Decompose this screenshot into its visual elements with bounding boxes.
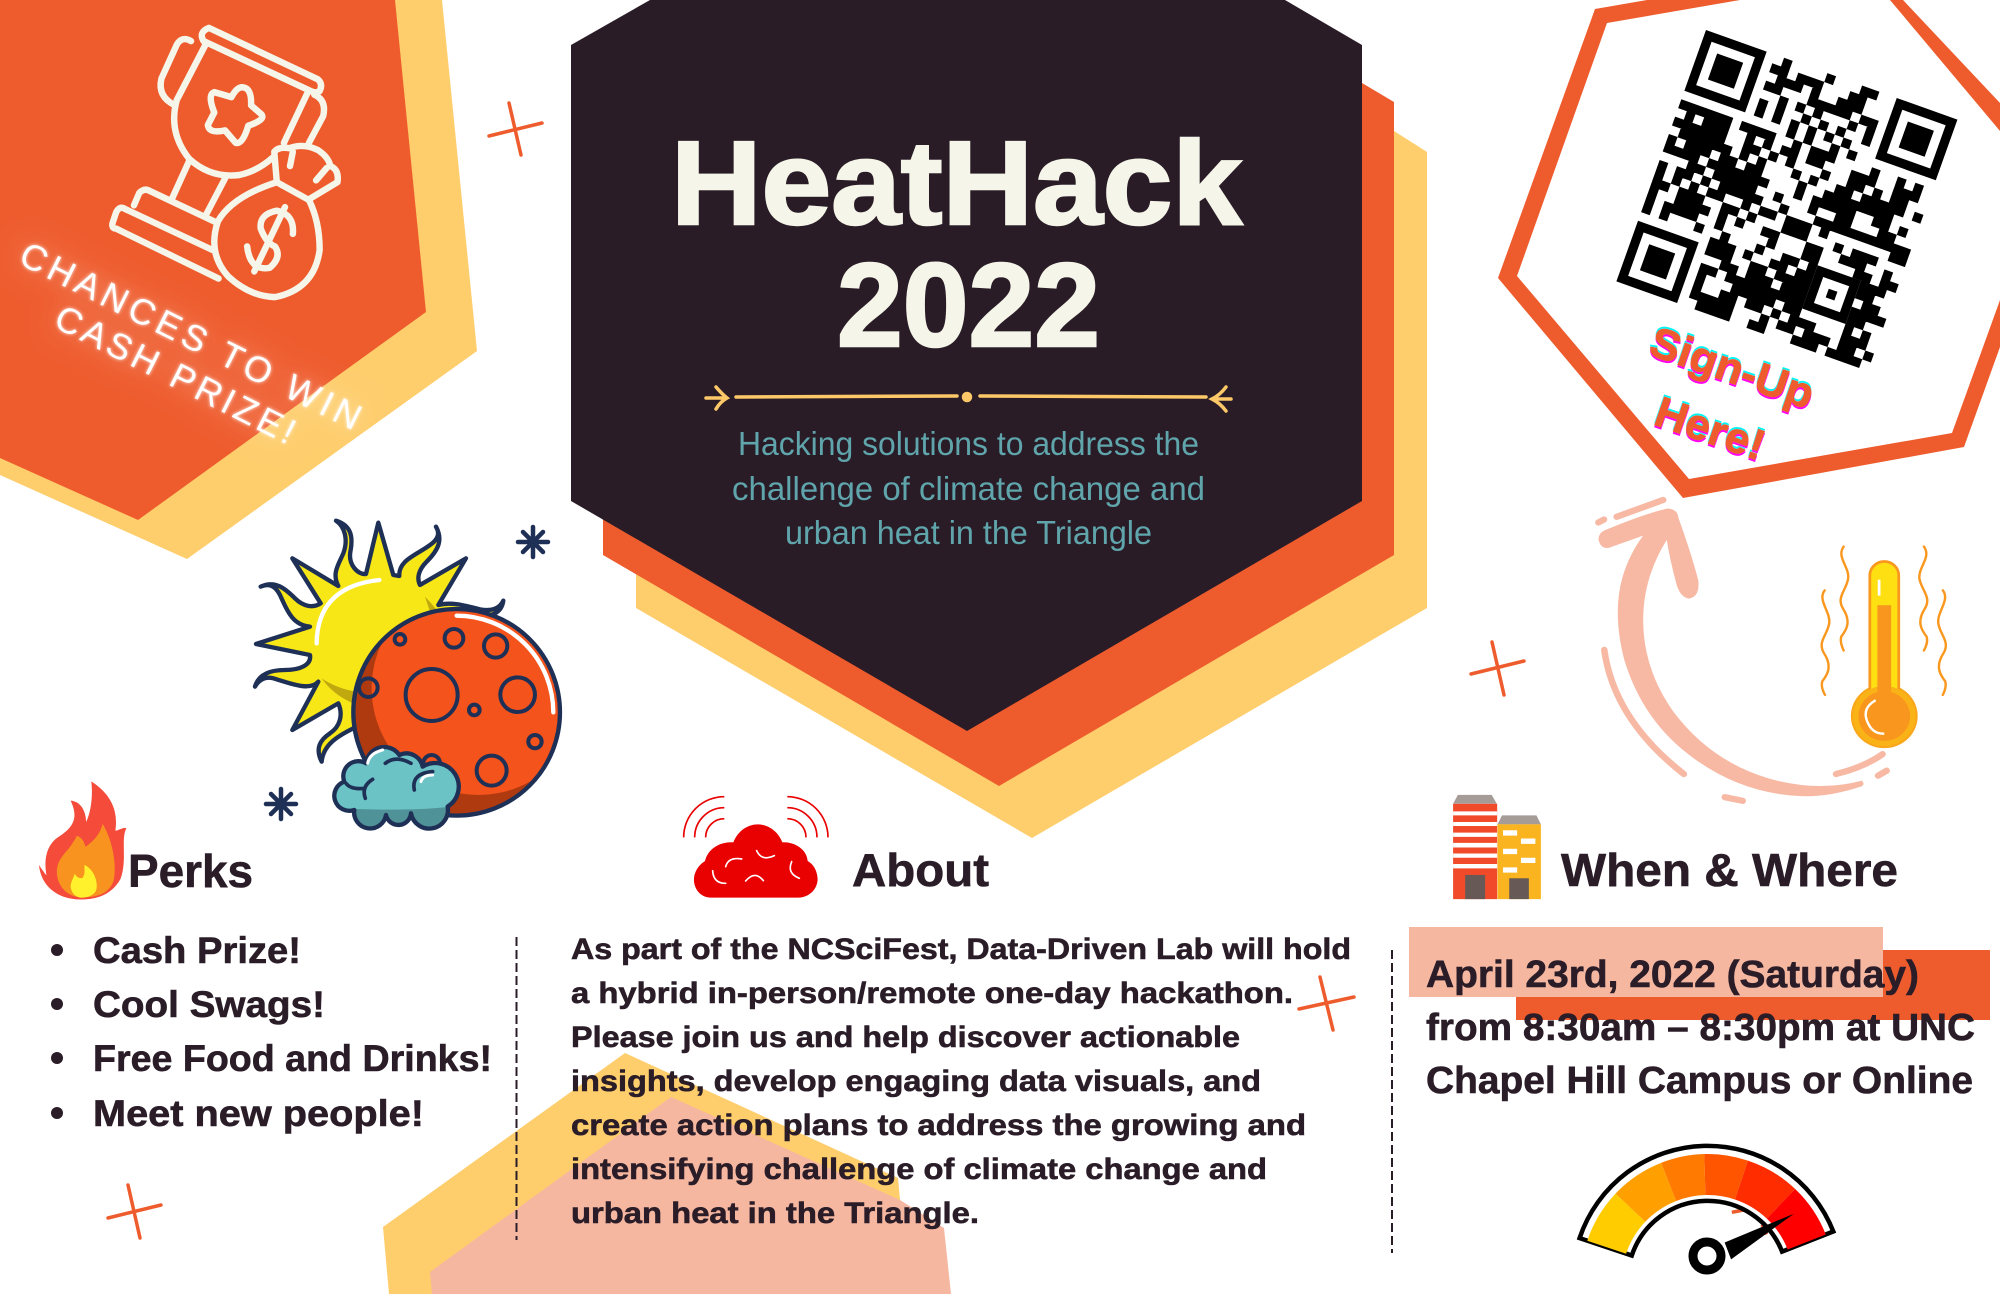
text: chances to win cash prize: CASH PRIZE! [48, 297, 303, 452]
about paragraph: create action plans to address the growing and [571, 1109, 1306, 1142]
perks list: Meet new people! [93, 1093, 424, 1134]
icon: thermometer [1822, 547, 1946, 748]
divider with arrows [706, 387, 1231, 411]
when and where text: Chapel Hill Campus or Online [1426, 1060, 1973, 1102]
about paragraph: a hybrid in-person/remote one-day hackathon. [571, 977, 1293, 1010]
icon: flame [39, 781, 126, 899]
QR code [1616, 30, 1957, 371]
perks list: Cash Prize! [93, 930, 301, 971]
icon: star top [518, 527, 548, 557]
icon: city buildings [1453, 795, 1541, 899]
heading: when and where: When & Where [1561, 844, 1898, 896]
decorative cross: right [1471, 642, 1524, 695]
title: 2022 [837, 239, 1100, 372]
when and where text: from 8:30am – 8:30pm at UNC [1426, 1007, 1975, 1049]
about paragraph [571, 933, 1351, 1230]
icon: star bottom [266, 789, 296, 819]
perks list: Cool Swags! [93, 984, 325, 1025]
panel: bottom hexagon [383, 1053, 951, 1294]
decorative cross: bottom left [108, 1185, 161, 1238]
subtitle: challenge of climate change and [732, 470, 1205, 507]
when and where text [1426, 954, 1975, 1102]
icon: sun, planet and cloud [255, 521, 585, 829]
text: sign-up here [1644, 318, 1820, 470]
heading: perks: Perks [128, 845, 253, 897]
date highlight [1409, 927, 1990, 1020]
text: sign-up here: Sign-Up [1644, 318, 1820, 419]
perks list [51, 930, 492, 1134]
text: chances to win cash prize: CHANCES TO WIN [13, 233, 368, 438]
about paragraph: insights, develop engaging data visuals, and [571, 1065, 1261, 1098]
decorative cross: top left [489, 103, 542, 155]
icon: trophy and money bag [112, 28, 338, 297]
subtitle: urban heat in the Triangle [785, 514, 1152, 551]
subtitle: Hacking solutions to address the [738, 425, 1199, 462]
subtitle [732, 425, 1205, 551]
panel: QR hexagon outline [1498, 0, 2000, 498]
about paragraph: As part of the NCSciFest, Data-Driven Lab will hold [571, 933, 1351, 966]
panel: centre title hexagon [571, 0, 1427, 838]
decorative cross: about [1299, 977, 1354, 1030]
about paragraph: Please join us and help discover actionable [571, 1021, 1240, 1054]
text: sign-up here: Here! [1649, 388, 1771, 470]
title: HeatHack [671, 117, 1243, 250]
when and where text: April 23rd, 2022 (Saturday) [1426, 954, 1919, 996]
icon: heat gauge [1577, 1143, 1834, 1273]
panel: top-left prize hexagon [0, 0, 477, 559]
heading: about: About [852, 844, 989, 896]
icon: curved arrow [1598, 500, 1887, 801]
about paragraph: urban heat in the Triangle. [571, 1197, 979, 1230]
icon: red brain with signals [684, 797, 828, 898]
about paragraph: intensifying challenge of climate change and [571, 1153, 1267, 1186]
title [671, 117, 1243, 372]
perks list: Free Food and Drinks! [93, 1038, 492, 1079]
